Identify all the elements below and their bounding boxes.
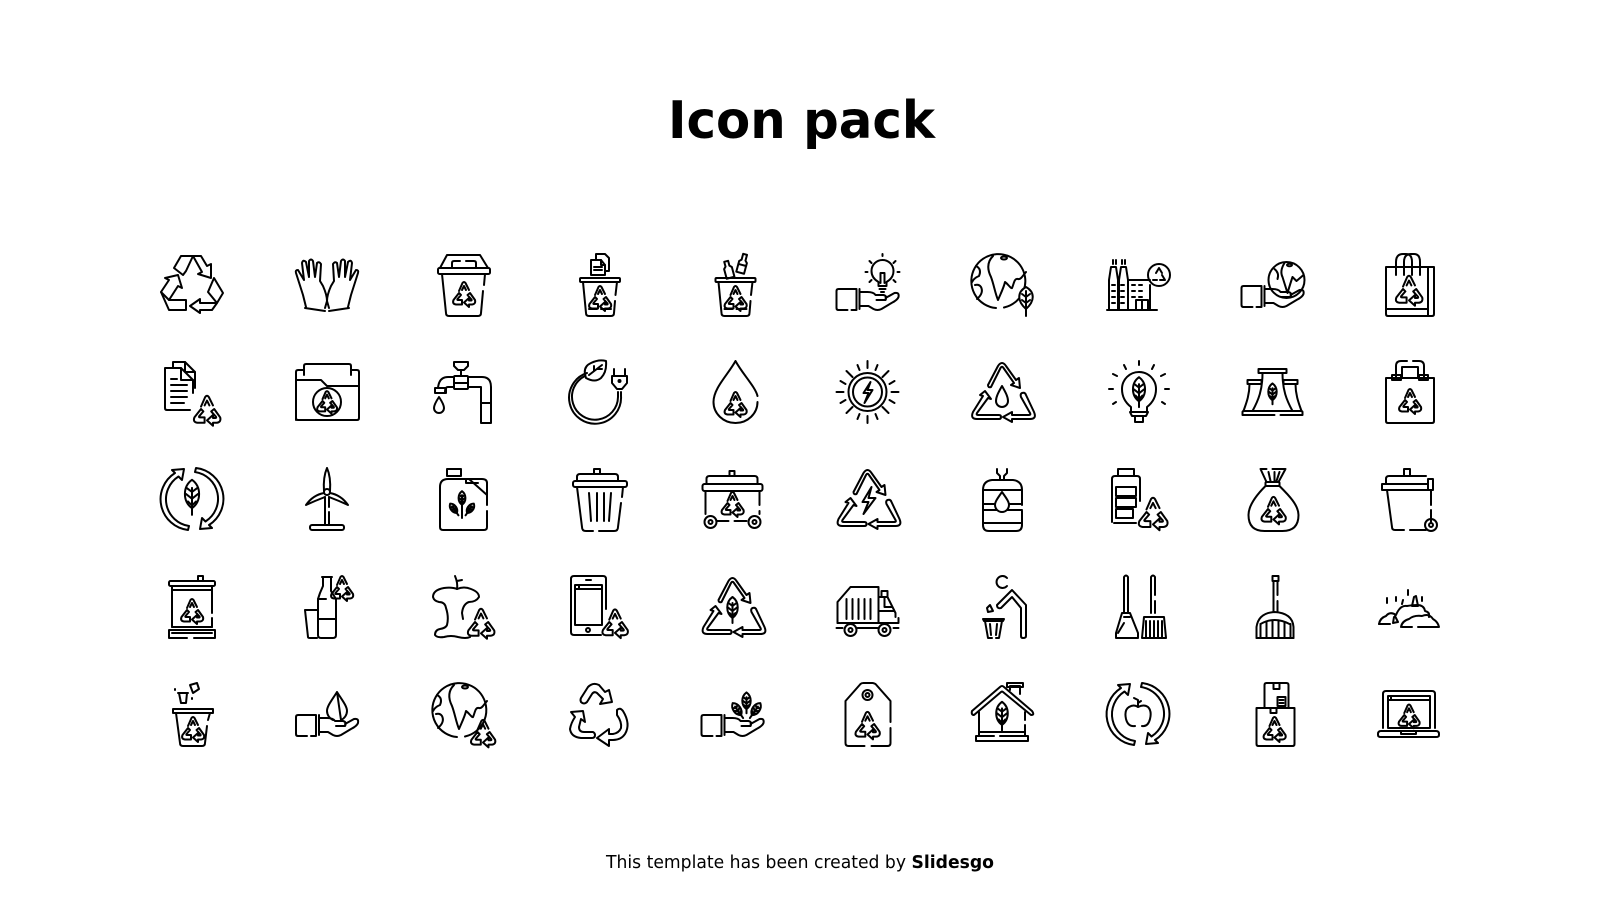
icon: hand with plant — [702, 692, 764, 736]
icon: broom and rake — [1116, 576, 1166, 638]
icon: eco house — [972, 683, 1033, 741]
icon: earth with recycling — [432, 683, 495, 747]
icon: lidded recycling bin — [438, 255, 490, 316]
icon: water tap — [434, 362, 491, 423]
icon: wheeled dumpster — [702, 471, 762, 528]
icon: hand holding light bulb — [836, 254, 900, 310]
icon grid — [161, 253, 1439, 747]
icon: cooling tower — [1242, 369, 1302, 415]
footer credit: This template has been created by Slidesgo — [605, 853, 994, 873]
icon: leaf light bulb — [1109, 361, 1169, 422]
icon: rounded recycle symbol — [570, 684, 628, 746]
icon: documents with recycling — [165, 362, 220, 426]
icon: hand with water drop — [296, 692, 358, 736]
icon: battery with recycling — [1112, 469, 1168, 530]
icon: circular arrows with apple — [1107, 683, 1169, 745]
icon: factory with recycling badge — [1107, 260, 1170, 310]
icon: circular arrows with leaf — [161, 468, 223, 530]
icon: recycle triangle with bolt — [838, 470, 900, 529]
icon: garbage bag — [1248, 469, 1298, 531]
icon: dustpan — [1256, 576, 1294, 638]
icon: recycle triangle with drop — [972, 363, 1035, 422]
icon: leaf and plug — [569, 360, 627, 424]
icon: hand holding globe — [1242, 262, 1304, 307]
icon: recycling folder — [296, 364, 359, 420]
icon: water drop recycle — [714, 361, 758, 423]
title: Icon pack — [668, 91, 936, 151]
icon: paper recycling bin — [580, 254, 620, 316]
icon: jerry can with plant — [440, 469, 487, 530]
icon: recycle triangle with leaf — [703, 578, 765, 637]
icon: glass bottle recycling bin — [716, 253, 756, 316]
icon: water cooler bottle — [983, 469, 1022, 531]
icon: trash can — [573, 469, 627, 531]
icon: bin with falling cups — [173, 683, 213, 746]
icon: wheeled bin — [1382, 469, 1437, 531]
icon: recycling barrel — [169, 576, 215, 638]
icon: parcel and bag — [1256, 683, 1294, 746]
icon: earth with leaf — [971, 254, 1033, 316]
icon: garbage pile — [1379, 590, 1439, 627]
icon: shopping bag with handle — [1386, 254, 1434, 316]
icon: gloves — [296, 260, 358, 311]
icon: apple core — [433, 576, 494, 639]
icon: bottle and glass recycling — [305, 576, 353, 638]
icon: wind turbine — [306, 468, 348, 530]
icon: garbage truck — [836, 587, 898, 636]
icon: laptop recycling — [1378, 691, 1439, 737]
icon: person using trash bin — [983, 576, 1026, 638]
icon: recycle price tag — [846, 683, 890, 746]
icon: smartphone recycling — [571, 576, 628, 638]
icon: sun with bolt — [836, 361, 898, 423]
icon: tote bag — [1386, 361, 1434, 423]
icon: recycle arrows — [161, 256, 223, 313]
